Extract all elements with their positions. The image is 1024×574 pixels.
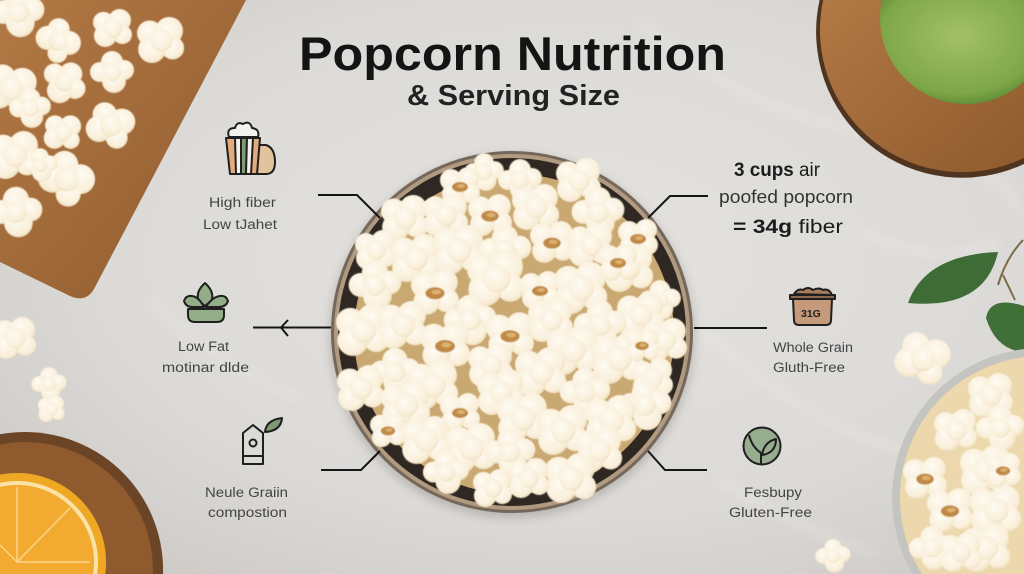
label: low fat <box>162 339 249 375</box>
icon: popcorn box <box>226 123 275 174</box>
arrow: middle left <box>253 320 331 336</box>
label: low fat: motinar dlde <box>162 360 249 375</box>
serving size callout: poofed popcorn <box>719 187 853 207</box>
connector: top right <box>648 196 708 218</box>
scattered popcorn, right <box>815 324 957 573</box>
label: whole grain: Whole Grain <box>773 340 853 355</box>
serving size callout <box>719 160 853 238</box>
label: neule grain <box>205 485 288 520</box>
serving size callout: 3 cups air <box>734 160 821 181</box>
label: whole grain <box>773 340 853 375</box>
connector: middle right <box>694 327 767 329</box>
label: neule grain: Neule Graiin <box>205 485 288 500</box>
icon: leafy bowl <box>184 283 228 322</box>
scattered popcorn, left <box>0 317 67 422</box>
label: whole grain: Gluth-Free <box>773 360 845 375</box>
connector: top left <box>318 195 380 218</box>
label: high fiber <box>203 195 277 232</box>
icon: 31G container: 31G <box>801 308 821 320</box>
green leaves, right edge <box>908 240 1024 352</box>
round wooden board with green apple, top right <box>816 0 1024 178</box>
label: fesbupy <box>729 485 812 520</box>
label: high fiber: High fiber <box>209 195 277 210</box>
label: high fiber: Low tJahet <box>203 217 277 232</box>
label: neule grain: compostion <box>208 505 287 520</box>
wooden bowl with orange slice, bottom left <box>0 432 163 574</box>
connector: bottom right <box>648 451 707 470</box>
wooden cutting board, top left <box>0 0 246 298</box>
subtitle: & Serving Size <box>407 80 620 112</box>
green apple <box>880 0 1024 104</box>
icon: 31G container <box>790 288 835 325</box>
scattered popcorn on the board <box>0 0 184 237</box>
orange slice <box>0 473 106 574</box>
serving size callout: = 34g fiber <box>733 217 844 238</box>
label: fesbupy: Fesbupy <box>744 485 802 500</box>
icon: leaf badge <box>744 428 780 464</box>
glass bowl of popcorn, bottom right <box>892 349 1024 574</box>
icon: grain bottle with leaf <box>243 418 282 464</box>
label: low fat: Low Fat <box>178 339 229 354</box>
title: Popcorn Nutrition <box>299 27 726 80</box>
central popcorn bowl <box>330 151 694 518</box>
popcorn pile <box>336 153 687 507</box>
connector: bottom left <box>321 451 380 470</box>
label: fesbupy: Gluten-Free <box>729 505 812 520</box>
